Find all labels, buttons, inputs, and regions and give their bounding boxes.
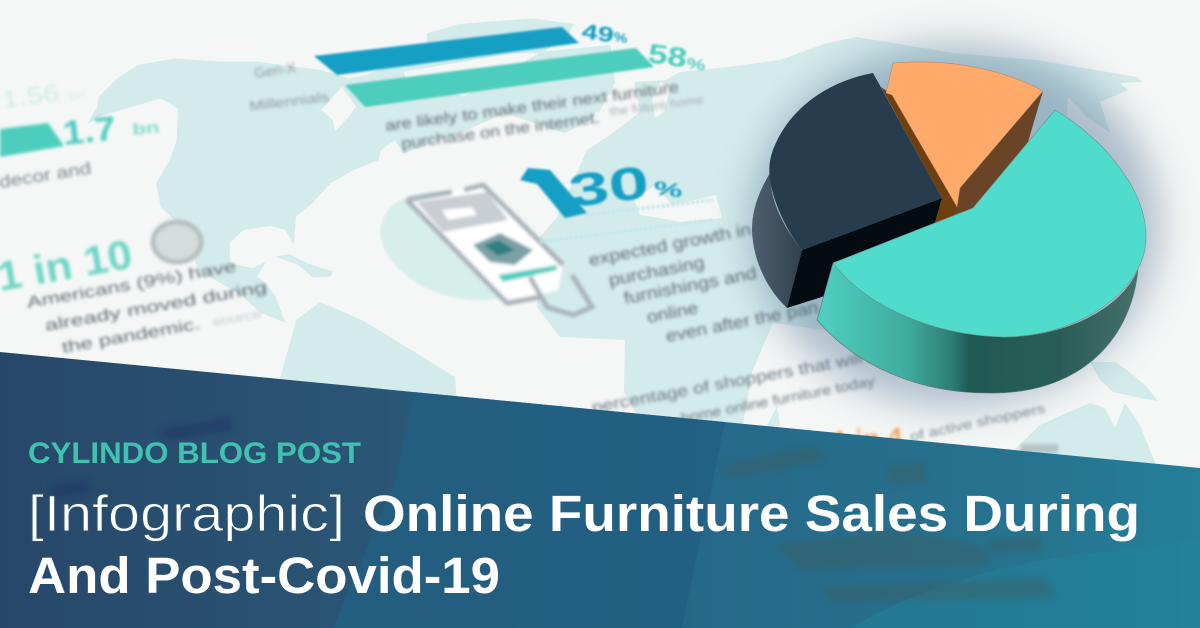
text: expected growth: online bbox=[645, 298, 700, 327]
icon: phone with sofa bbox=[366, 173, 592, 319]
text: percentage of shoppers: home online furniture today bbox=[680, 373, 876, 426]
banner bbox=[0, 352, 1200, 628]
slice: dark side walls bbox=[752, 173, 942, 308]
left stat: 1.7 bn: bn bbox=[132, 119, 160, 139]
banner blurred bars bbox=[50, 417, 1057, 603]
map: UK bbox=[580, 112, 610, 142]
left stat: 1.7 bn bbox=[0, 79, 160, 192]
stat: 30%: % bbox=[652, 178, 684, 203]
text: percentage of shoppers: of active shoppers bbox=[909, 400, 1047, 444]
phone halo bbox=[366, 173, 550, 319]
left stat: 1.7 bn: 1.56 bbox=[0, 79, 61, 113]
slice: teal top bbox=[833, 110, 1146, 337]
stat: 1 in 10: already moved during bbox=[44, 279, 268, 335]
map: North America bbox=[87, 58, 413, 323]
stat: 1 in 10: the pandemic. bbox=[61, 316, 202, 357]
arrow: up bbox=[520, 168, 587, 218]
map: Australia bbox=[1012, 403, 1158, 470]
bar chart: Gen-X vs Millennials: % bbox=[613, 29, 629, 46]
stat: 30% bbox=[566, 156, 684, 217]
banner background bbox=[0, 352, 1200, 628]
stat: 30%: 30 bbox=[566, 156, 652, 217]
bar chart: Gen-X vs Millennials: 58 bbox=[646, 38, 689, 73]
text: likely to purchase: are likely to make their next furniture bbox=[384, 79, 680, 135]
banner title bbox=[28, 485, 1140, 604]
map: Mediterranean gap bbox=[634, 185, 722, 222]
text: likely to purchase: the future home bbox=[609, 92, 705, 119]
slice: orange side walls bbox=[881, 87, 1043, 223]
left stat: 1.7 bn: 1.7 bbox=[61, 110, 118, 153]
slice: dark top bbox=[769, 73, 942, 250]
slice: teal wall bbox=[817, 263, 1138, 393]
map: Greenland south bbox=[395, 45, 615, 153]
text: percentage of shoppers bbox=[591, 350, 1058, 456]
world map bbox=[87, 18, 1158, 470]
banner lower right arc bbox=[850, 540, 1200, 628]
stat: 1 in 10 bbox=[0, 222, 268, 357]
text: expected growth: furnishings and bbox=[622, 264, 758, 308]
stat: 1 in 10: source bbox=[211, 306, 263, 329]
stat: 1 in 10: Americans (9%) have bbox=[26, 258, 238, 312]
map: Madagascar bbox=[766, 406, 780, 428]
map: Caribbean bbox=[275, 254, 333, 277]
banner title: And Post-Covid-19 bbox=[28, 547, 500, 604]
text: expected growth: expected growth in bbox=[587, 220, 753, 270]
map: Greenland bbox=[367, 18, 574, 75]
bar labels: Millennials bbox=[248, 88, 330, 114]
map: South-East Asia bbox=[1090, 362, 1158, 401]
bar chart: Gen-X vs Millennials: 49 bbox=[580, 20, 615, 47]
text: percentage of shoppers: percentage of shoppers that will bbox=[591, 350, 864, 417]
map: Eurasia and Africa bbox=[537, 37, 1142, 430]
slice: orange top bbox=[886, 62, 1043, 207]
text: likely to purchase: purchase on the internet. bbox=[400, 110, 601, 153]
text: expected growth: even after the pan bbox=[664, 298, 820, 346]
blurred infographic fragments bbox=[0, 20, 1058, 456]
map: North Sea gap bbox=[652, 82, 670, 118]
bar chart: Gen-X vs Millennials: % bbox=[685, 55, 707, 75]
text: likely to purchase bbox=[384, 79, 705, 153]
banner title: Online Furniture Sales During bbox=[363, 485, 1140, 542]
pie shadow bbox=[750, 43, 1160, 407]
map: Hudson Bay gap bbox=[321, 87, 356, 132]
bar labels: Gen-X bbox=[253, 59, 298, 81]
left stat: 1.7 bn: bn bbox=[67, 87, 87, 104]
map: South America bbox=[280, 302, 457, 402]
dotted rules bbox=[540, 200, 713, 242]
banner eyebrow: CYLINDO BLOG POST bbox=[28, 437, 361, 470]
pie chart bbox=[750, 43, 1160, 407]
bar labels bbox=[248, 59, 330, 114]
banner texture band bbox=[333, 392, 725, 628]
text: expected growth: purchasing bbox=[607, 253, 706, 290]
text: expected growth bbox=[587, 220, 820, 346]
bar chart: Gen-X vs Millennials bbox=[314, 20, 707, 107]
text: percentage of shoppers: 1 in 4 bbox=[832, 422, 903, 456]
banner title: [Infographic] bbox=[28, 485, 345, 542]
